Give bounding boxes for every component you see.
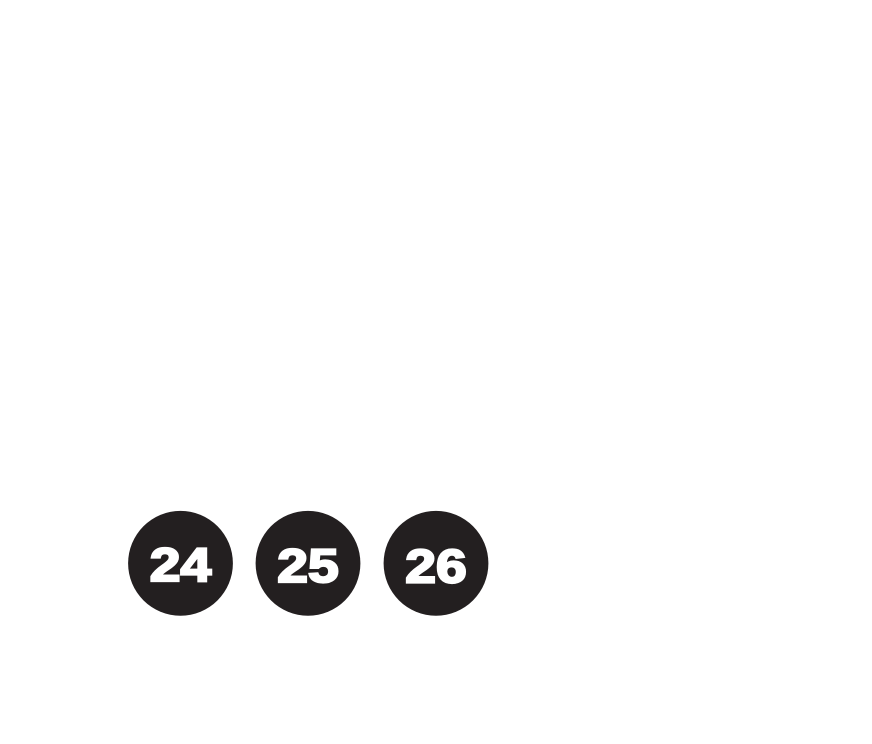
badge: 24: 24: [150, 538, 211, 591]
badge: 26: [384, 511, 488, 616]
badge: 25: [256, 511, 360, 616]
badge: 24: [128, 511, 233, 616]
badge: 25: 25: [277, 539, 339, 592]
badge: 26: 26: [405, 540, 467, 593]
